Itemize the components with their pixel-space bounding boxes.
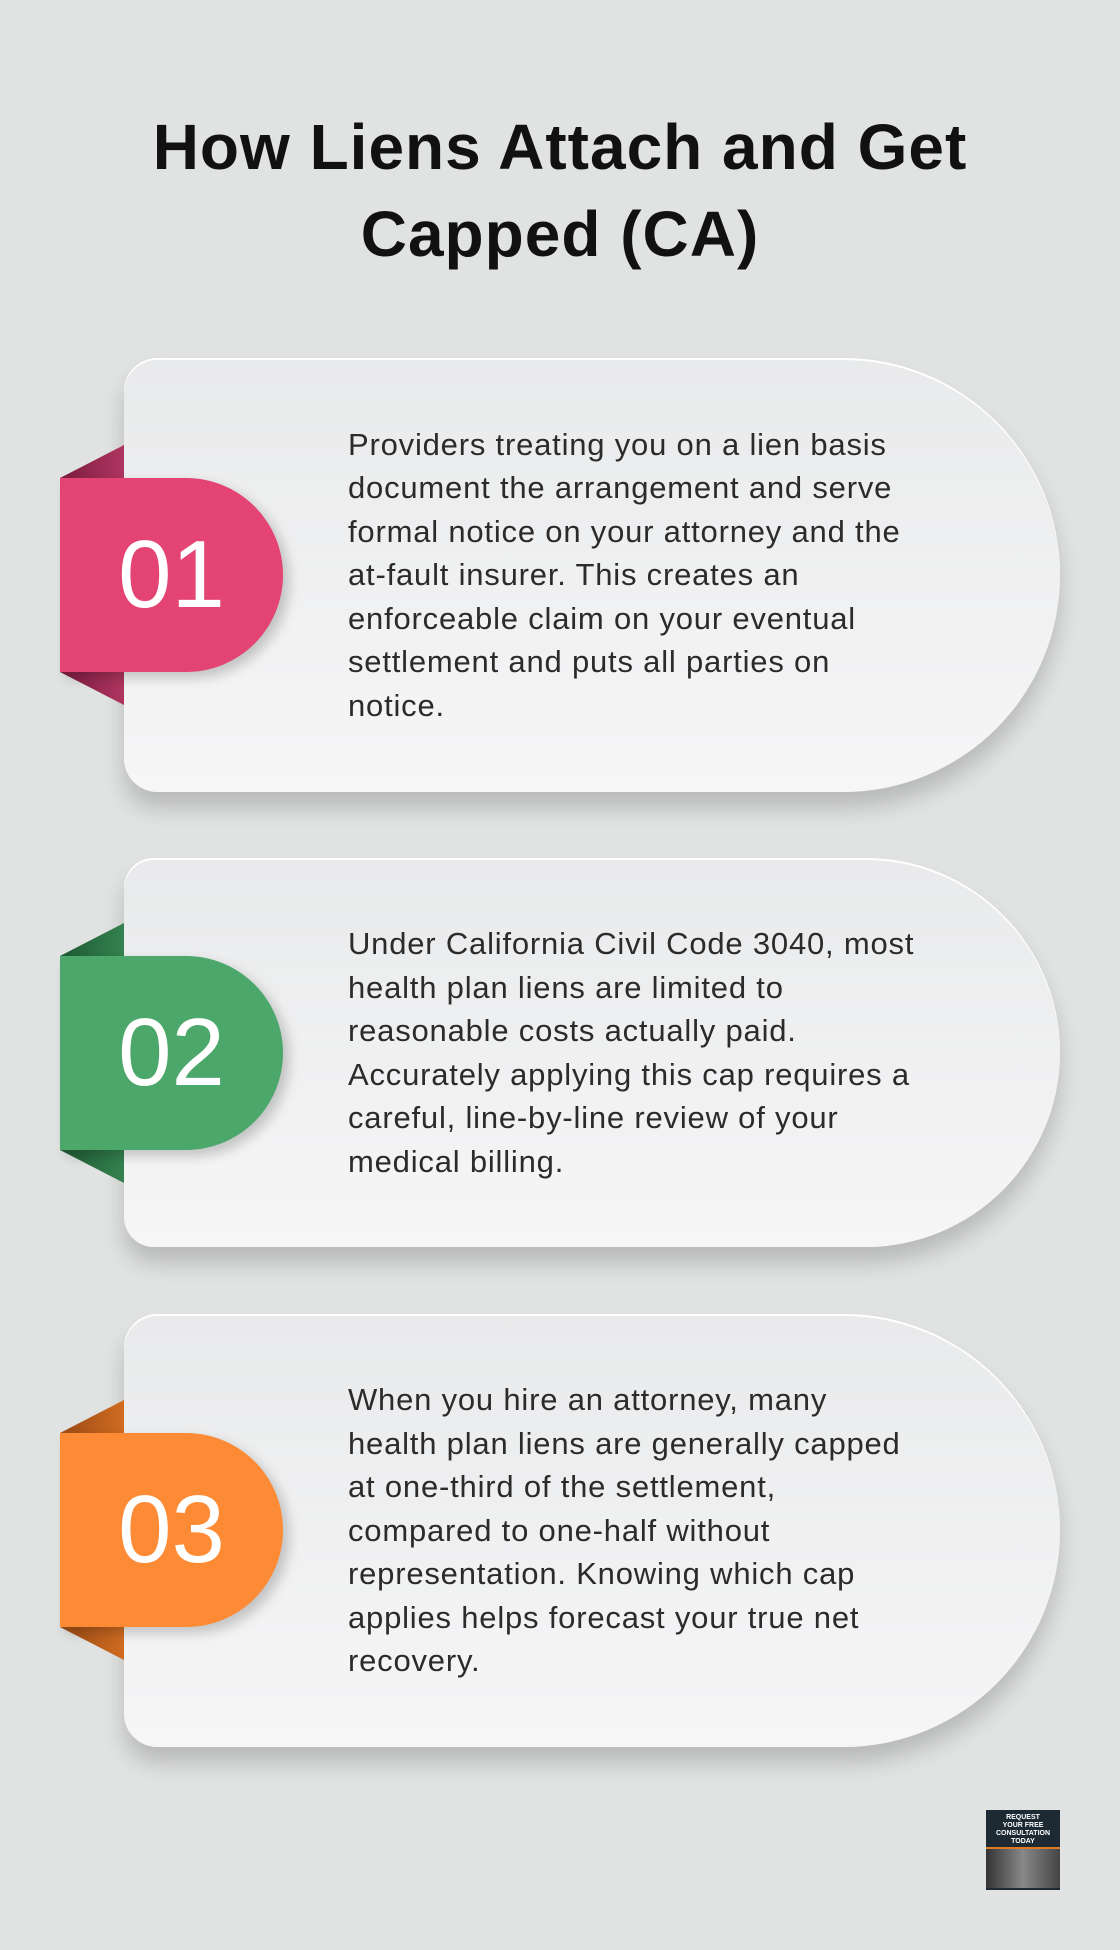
logo: consultation badge: CONSULTATION — [996, 1830, 1050, 1837]
text: step 2: medical billing. — [348, 1144, 564, 1178]
text: step 1: formal notice on your attorney and the — [348, 514, 901, 549]
text: step 1: document the arrangement and serve — [348, 470, 892, 505]
title: Capped (CA) — [361, 198, 759, 270]
title — [153, 111, 967, 270]
panel: step 2 — [124, 858, 1060, 1247]
text: step 1: enforceable claim on your eventual — [348, 601, 856, 636]
text: step 3: representation. Knowing which cap — [348, 1556, 855, 1591]
text: step 3: compared to one-half without — [348, 1513, 770, 1548]
text: step 1: Providers treating you on a lien basis — [348, 427, 887, 462]
panel: step 3 — [124, 1314, 1060, 1747]
text: step 2 — [348, 926, 914, 1178]
text: step 1: at-fault insurer. This creates an — [348, 557, 799, 592]
badge: 01: 01 — [118, 521, 225, 628]
text: step 2: health plan liens are limited to — [348, 970, 784, 1004]
text: step 1: notice. — [348, 688, 445, 723]
badge: 03: 03 — [118, 1476, 225, 1583]
panel: step 1 — [124, 358, 1060, 792]
text: step 3: When you hire an attorney, many — [348, 1382, 827, 1417]
text: step 2: reasonable costs actually paid. — [348, 1013, 797, 1048]
text: step 2: Accurately applying this cap requires a — [348, 1056, 910, 1092]
text: step 3: applies helps forecast your true net — [348, 1600, 859, 1635]
logo: consultation badge: REQUEST — [1006, 1814, 1040, 1821]
badge: 03 — [60, 1400, 294, 1660]
logo: consultation badge: YOUR FREE — [1003, 1822, 1043, 1829]
title: How Liens Attach and Get — [153, 111, 967, 183]
text: step 1 — [348, 427, 901, 723]
text: step 3: health plan liens are generally capped — [348, 1426, 901, 1461]
badge: 01 — [60, 445, 294, 705]
badge: 02: 02 — [118, 999, 225, 1106]
text: step 3: at one-third of the settlement, — [348, 1469, 776, 1504]
text: step 2: careful, line-by-line review of your — [348, 1100, 839, 1135]
logo: consultation badge: TODAY — [1011, 1838, 1035, 1845]
text: step 3 — [348, 1382, 901, 1678]
text: step 2: Under California Civil Code 3040, most — [348, 926, 914, 961]
text: step 1: settlement and puts all parties on — [348, 644, 830, 679]
logo: consultation badge — [986, 1810, 1060, 1890]
text: step 3: recovery. — [348, 1643, 480, 1678]
badge: 02 — [60, 923, 294, 1183]
